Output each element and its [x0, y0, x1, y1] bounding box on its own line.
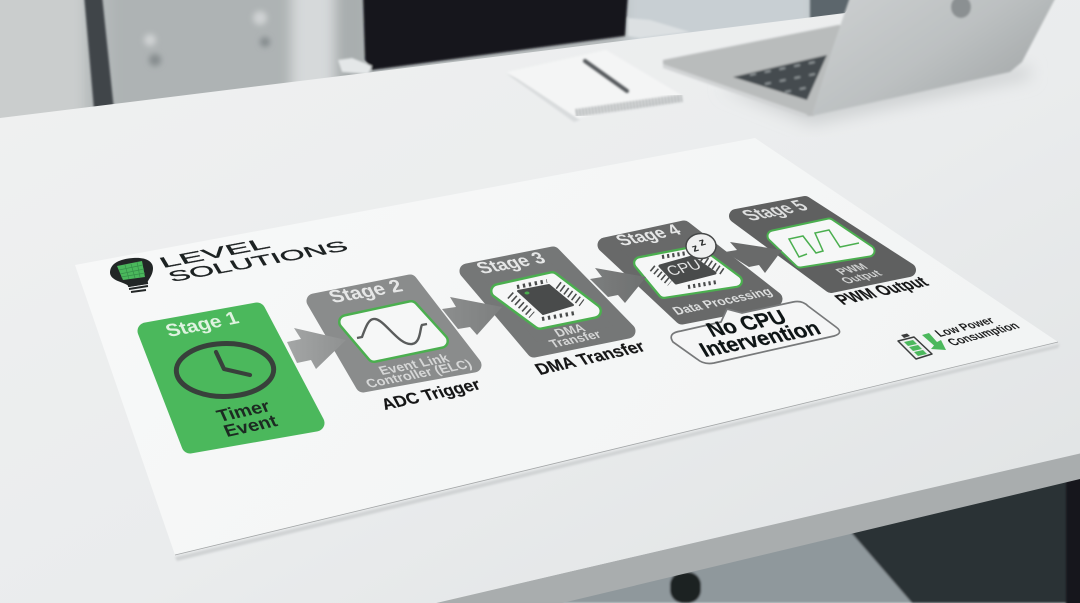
icon: sleep badge: z: [697, 236, 708, 249]
callout: No CPU Intervention: Intervention: [695, 317, 825, 361]
text: Low Power Consumption: Consumption: [944, 320, 1023, 348]
logo wordmark: LEVEL: [156, 235, 273, 271]
icon box: CPU: [640, 252, 736, 292]
background: black office chair: [338, 0, 690, 74]
arrow: stage 4 to stage 5: [725, 242, 782, 273]
icon: sleep badge: z: [690, 242, 701, 255]
caption: DMA Transfer: Transfer: [546, 327, 604, 350]
icon: battery: [898, 334, 932, 359]
label: DMA Transfer: DMA Transfer: [531, 337, 649, 378]
text: Timer Event: Event: [220, 411, 280, 440]
sheet shadow: [175, 344, 1060, 561]
panel: stage 2: [314, 276, 475, 391]
heading: stage 2: Stage 2: [325, 276, 406, 307]
label: ADC Trigger: ADC Trigger: [378, 375, 484, 414]
label: PWM Output: PWM Output: [830, 273, 933, 308]
panel: stage 5: [736, 197, 909, 286]
callout: No CPU Intervention: [671, 302, 840, 364]
panel: stage 3: [467, 248, 628, 350]
icon box: sine wave: [346, 308, 441, 355]
notebook with pen: [507, 50, 683, 122]
paper sheet: [75, 138, 1058, 555]
icon box: CPU: CPU: [663, 257, 705, 279]
heading: stage 1: Stage 1: [162, 308, 242, 341]
text: Timer Event: Timer: [213, 396, 273, 425]
text: Timer Event: [213, 396, 280, 440]
icon: light bulb with chip: [110, 258, 153, 292]
callout: No CPU Intervention: No CPU: [702, 306, 791, 341]
apple logo: [951, 0, 971, 18]
pen: [585, 61, 627, 91]
notebook spiral: [576, 98, 682, 113]
heading: stage 5: Stage 5: [737, 197, 814, 225]
icon box: chip: [498, 279, 594, 322]
laptop base: [663, 25, 860, 116]
heading: stage 3: Stage 3: [472, 248, 549, 277]
arrow: stage 3 to stage 4: [590, 268, 646, 303]
heading: stage 4: Stage 4: [611, 221, 685, 249]
caption: DMA Transfer: DMA: [551, 321, 588, 339]
legend: low power consumption: [898, 314, 1023, 359]
laptop: [663, 0, 1056, 125]
caption: Event Link Controller: Controller (ELC): [363, 357, 475, 391]
caption: Data Processing: Data Processing: [669, 285, 775, 317]
chair wheel: [670, 572, 701, 603]
desk side edge: [432, 452, 1080, 603]
icon: sleep badge: [686, 234, 716, 258]
laptop lid: [812, 0, 1056, 115]
icon box: PWM wave: [773, 224, 869, 262]
logo: Level Solutions: [110, 235, 352, 292]
panel: stage 4: [605, 221, 775, 317]
floor under the desk: [540, 470, 1080, 603]
logo wordmark: SOLUTIONS: [165, 238, 352, 285]
laptop keyboard: [733, 55, 827, 100]
caption: PWM Output: PWM: [832, 261, 872, 277]
icon: down arrow: [922, 333, 946, 350]
background: blurred office: [0, 0, 1080, 140]
caption: Event Link Controller: Event Link: [376, 351, 452, 378]
panel: stage 1: [146, 308, 316, 445]
arrow: stage 1 to stage 2: [287, 328, 346, 369]
text: Low Power Consumption: Low Power: [931, 314, 998, 339]
arrow: stage 2 to stage 3: [442, 297, 502, 335]
caption: PWM Output: Output: [837, 268, 886, 286]
icon: clock: [169, 339, 281, 401]
caption: PWM Output: [832, 261, 886, 286]
